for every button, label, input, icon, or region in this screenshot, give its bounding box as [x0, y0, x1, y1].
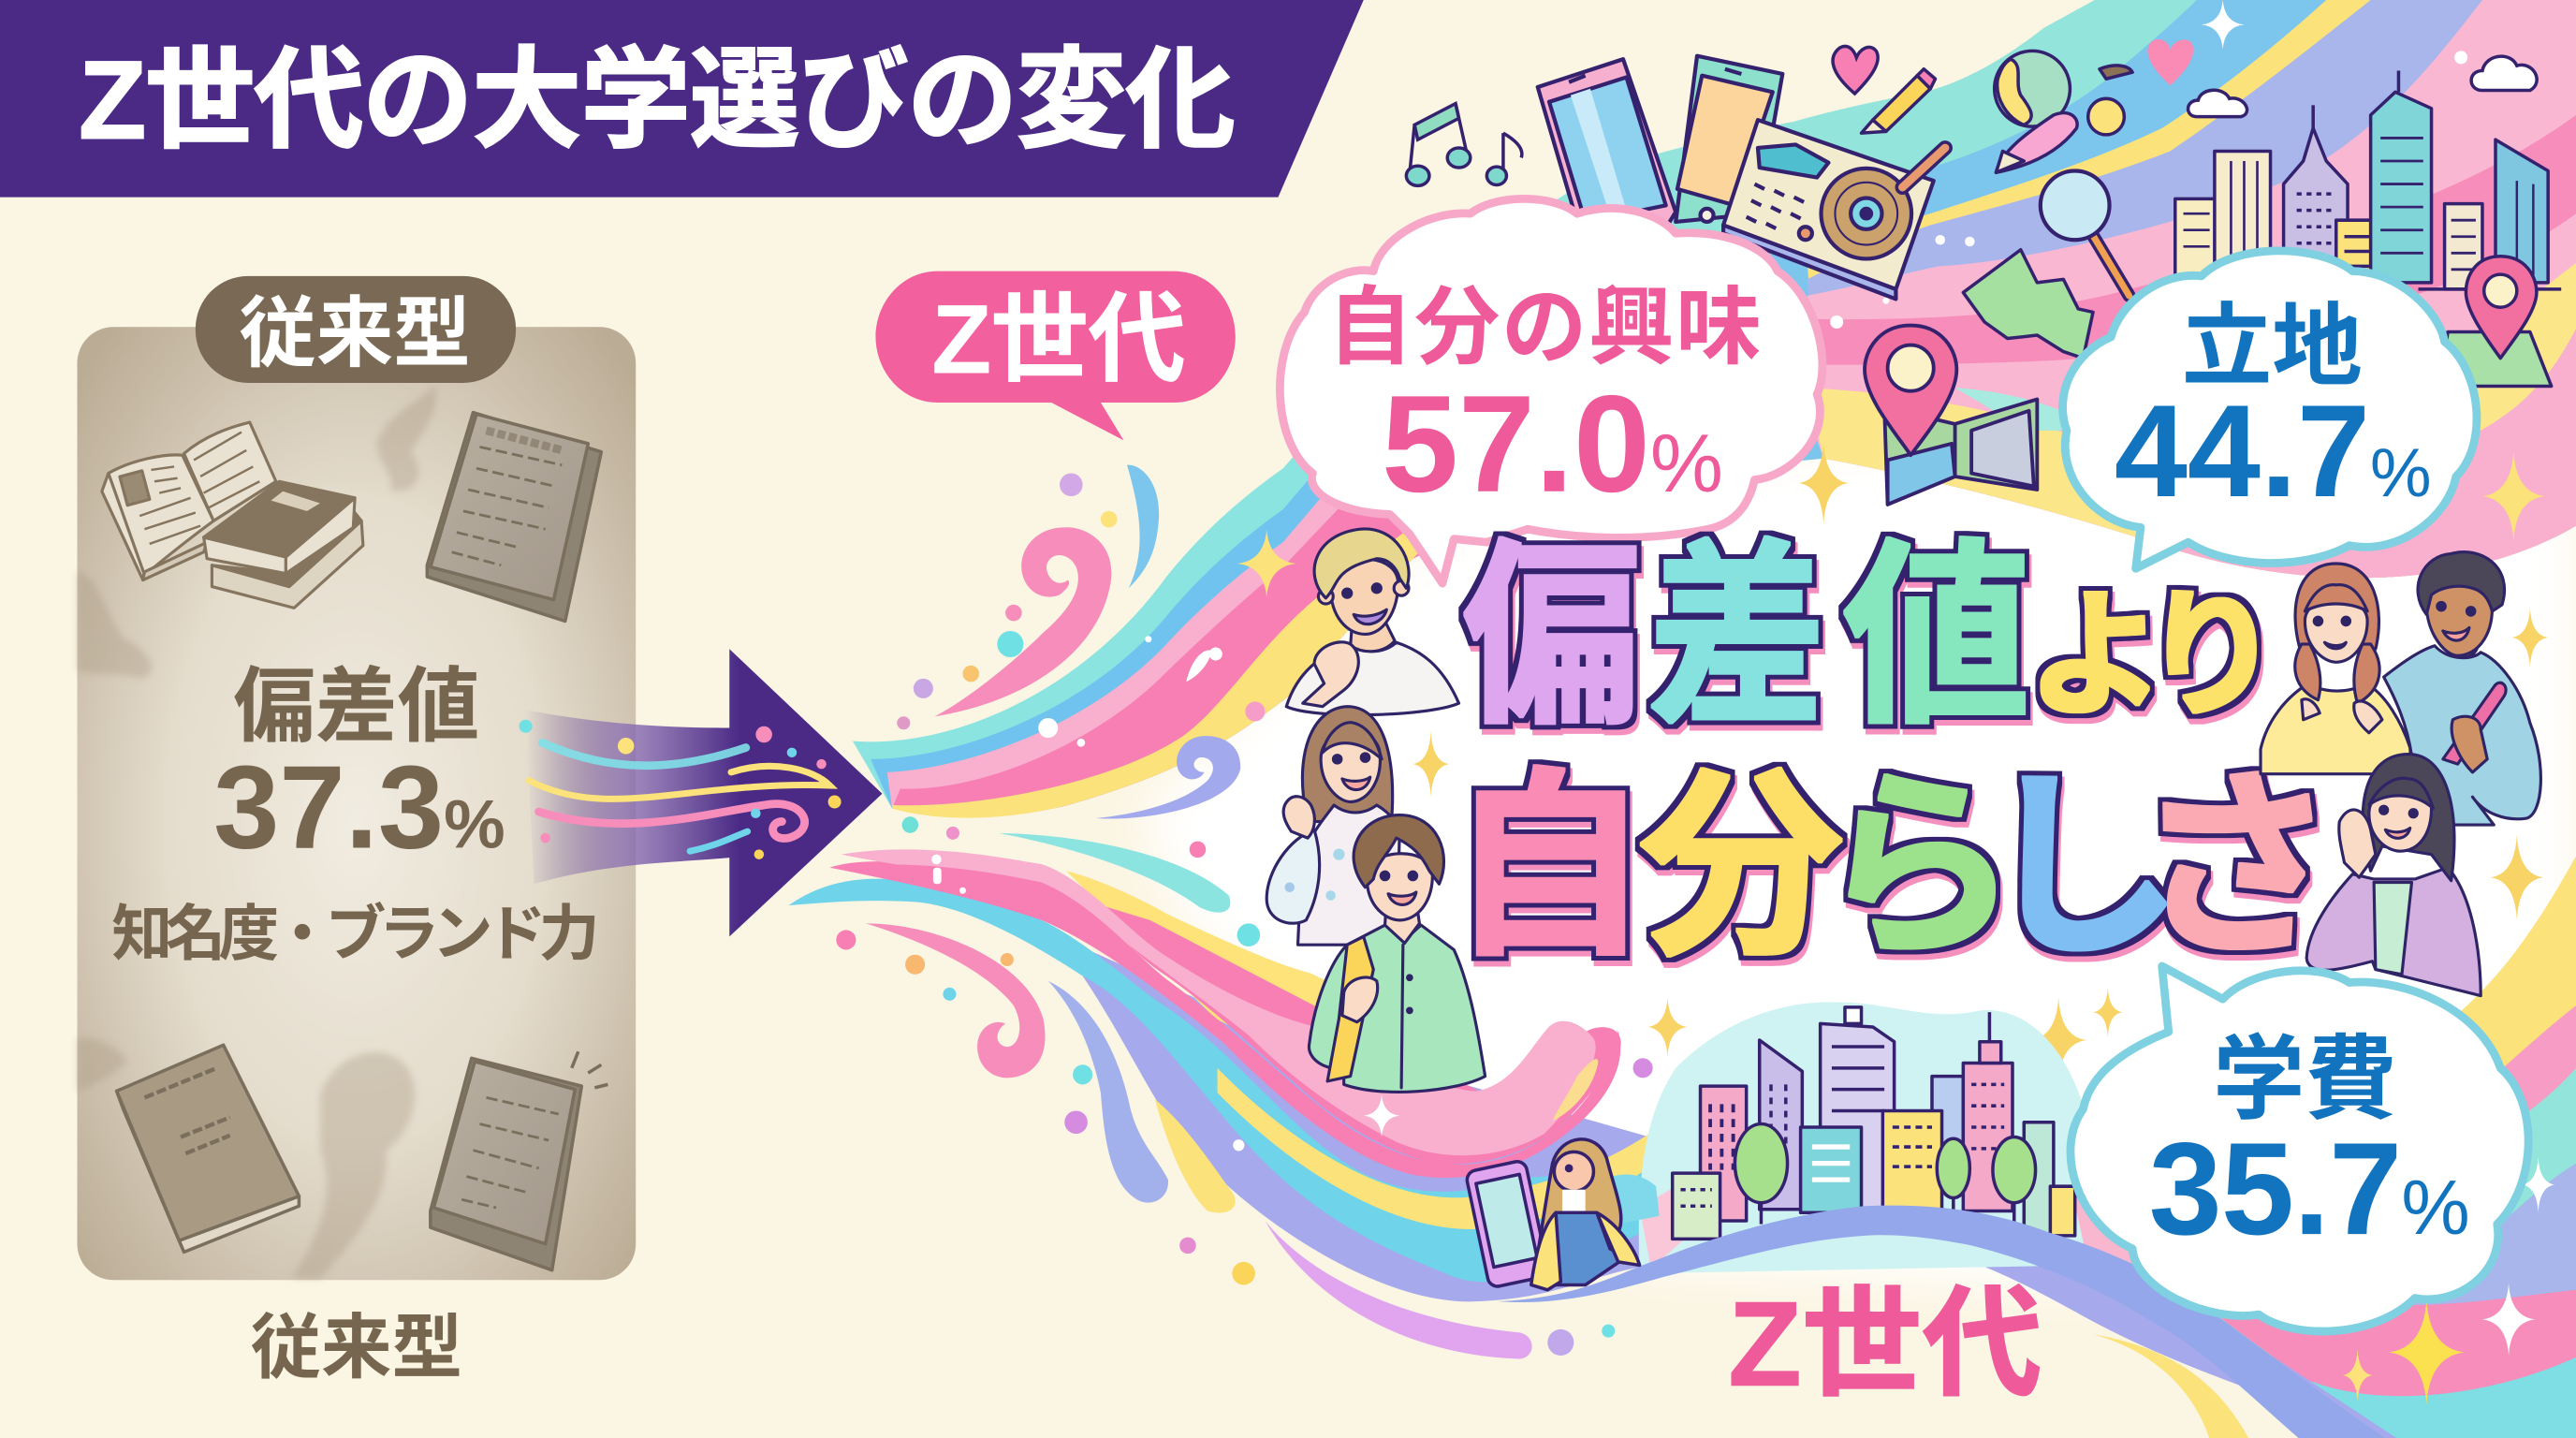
rainbow bands: upper right [1380, 0, 2576, 578]
caption: Gen Z: Z世代 [1728, 1278, 2042, 1412]
icon: pencil [1862, 69, 1936, 133]
bubble: own interest [1280, 198, 1822, 583]
badge: Gen Z speech bubble [875, 271, 1236, 440]
heading: rather than deviation value: よ [2027, 580, 2165, 733]
sparkles [1412, 442, 2554, 1405]
illustration: bottom city [1602, 1002, 2143, 1273]
lower rainbow stream from arrow [788, 849, 2398, 1438]
text: own interest: 自分の興味 [1327, 280, 1761, 375]
trees [1734, 1123, 2036, 1225]
illustration: boy in green shirt [1309, 815, 1486, 1092]
heading: being yourself [1449, 755, 2336, 979]
caption: traditional type: 従来型 [251, 1309, 462, 1387]
illustration: girl braided hair [2261, 564, 2411, 774]
pill label: 従来型 [239, 290, 471, 376]
icon: stone tablet [427, 413, 601, 621]
stains [77, 385, 436, 1278]
heading: being yourself: 自 [1449, 756, 1649, 979]
icon: clouds [2188, 56, 2537, 117]
icon: record player [1723, 120, 1945, 299]
title text: Z世代の大学選びの変化 [79, 38, 1236, 161]
heading: rather than deviation value: 偏 [1463, 528, 1640, 747]
bubble: tuition [2071, 966, 2528, 1331]
rainbow bands: lower right [2136, 856, 2576, 1438]
text: 37.3%: 37.3% [213, 741, 505, 873]
icon: map with pin right [2439, 257, 2552, 386]
icon: music notes [1406, 104, 1522, 185]
icon: magnifier [2041, 171, 2130, 296]
illustration: girl with raised hand [2306, 755, 2481, 996]
text: tuition: 学費 [2213, 1027, 2397, 1130]
heading: being yourself: さ [2136, 756, 2336, 979]
text: name recognition and brand: 知名度・ブランド力 [111, 900, 600, 968]
icon: globe and rocket [1995, 51, 2132, 172]
bubble: location [2063, 251, 2477, 568]
heading: rather than deviation value: 値 [1843, 526, 2030, 747]
icon: map with pin left [1865, 326, 2037, 505]
text: hensachi: 偏差値 [233, 661, 479, 753]
number: 35.7%: 35.7% [2149, 1115, 2469, 1262]
title banner [0, 0, 1364, 198]
arrow [520, 649, 882, 936]
pill label [196, 276, 516, 383]
badge: Gen Z speech bubble: Z世代 [931, 285, 1186, 394]
upper rainbow stream from arrow [853, 246, 1479, 818]
illustration: woman with phone [1465, 1139, 1640, 1290]
arrow swirls [529, 742, 829, 851]
heading: being yourself: 分 [1639, 755, 1844, 979]
icon: sparkle top [2202, 0, 2244, 50]
illustration: boy in hoodie [2384, 552, 2540, 825]
icon: phone mint [1676, 56, 1782, 222]
icon: phone pink [1538, 59, 1676, 250]
heading: rather than deviation value: り [2143, 580, 2280, 733]
decorative swirls and dots [836, 465, 2249, 1438]
icon: closed book [117, 1045, 299, 1252]
number: 57.0%: 57.0% [1382, 368, 1723, 521]
text: location: 立地 [2182, 298, 2363, 398]
illustration: blond boy [1286, 529, 1459, 715]
heading: rather than deviation value: 差 [1648, 528, 1826, 747]
heading: rather than deviation value [1463, 526, 2280, 747]
panel: traditional type [77, 276, 636, 1280]
icon: stone tablet lower [431, 1051, 607, 1270]
icon: heart [1833, 46, 1878, 94]
icon: open book [102, 422, 276, 580]
lavender band in front of city [1499, 1206, 2387, 1438]
heading: being yourself: ら [1819, 756, 2019, 979]
icon: city skyline top [2175, 70, 2561, 289]
number: 44.7%: 44.7% [2115, 377, 2432, 524]
white central area [1142, 411, 2576, 1299]
heading: being yourself: し [1982, 756, 2182, 979]
icon: green map [1963, 250, 2093, 359]
icon: pink heart [2147, 39, 2193, 85]
illustration: girl brown hair [1266, 707, 1399, 945]
icon: book stack [204, 481, 363, 608]
